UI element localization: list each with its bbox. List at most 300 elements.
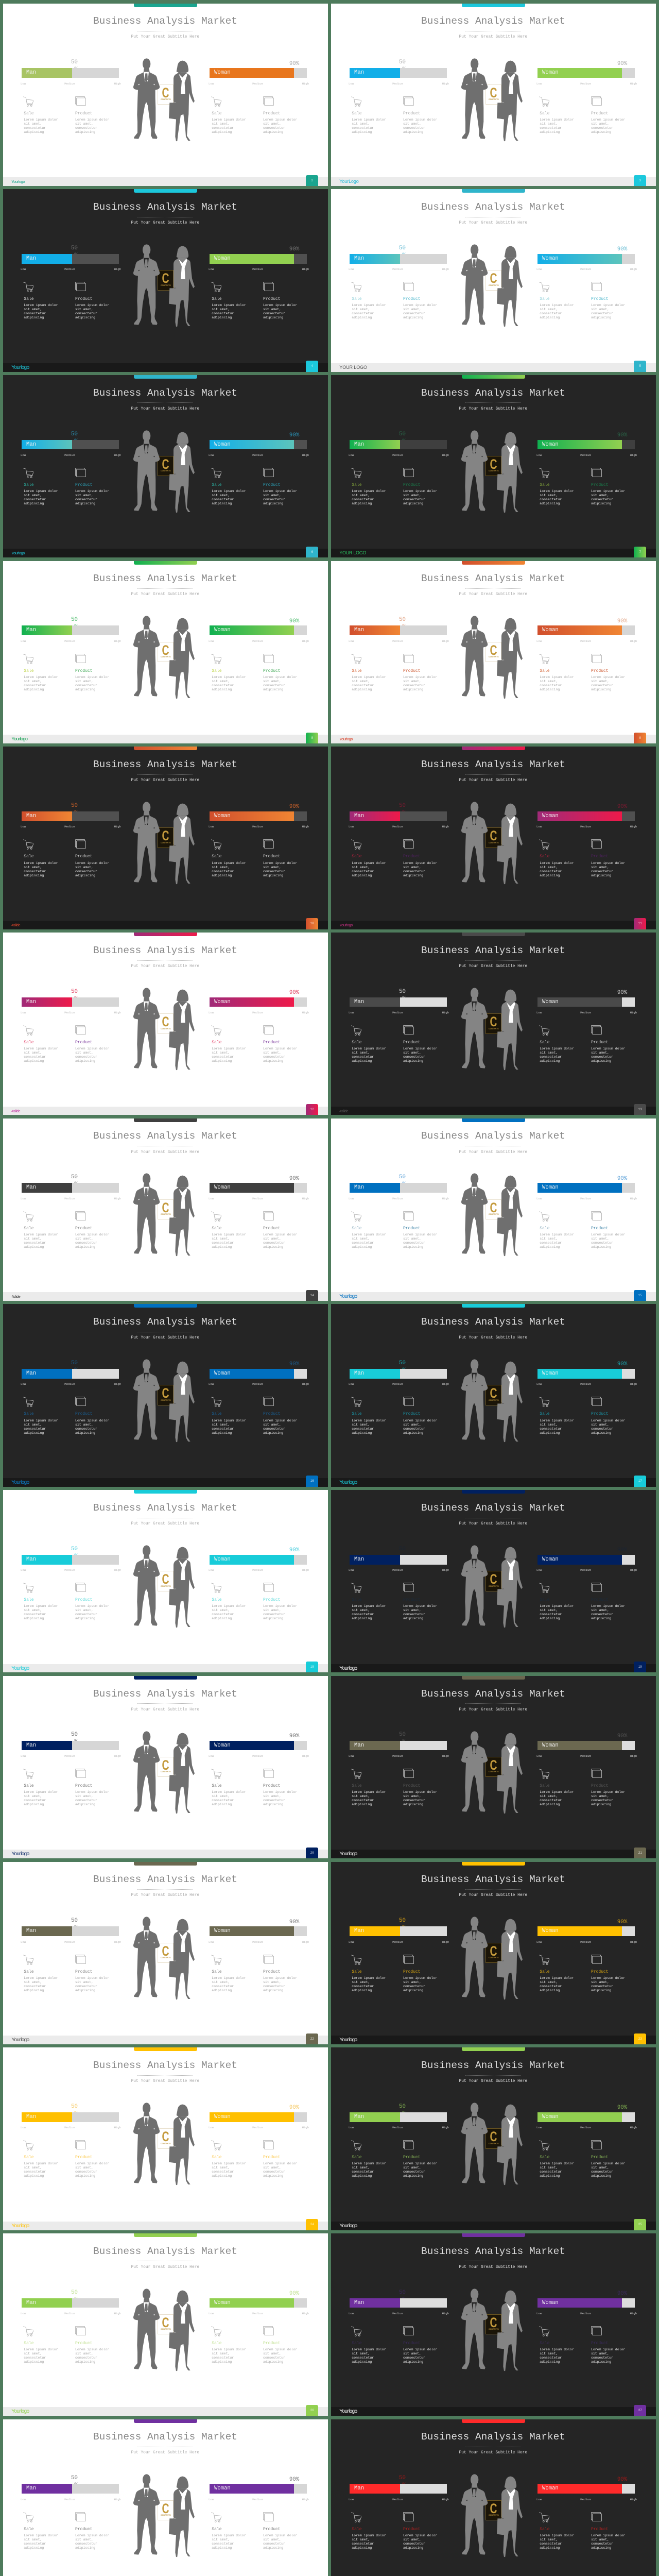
scale: High [442,639,449,643]
bar [210,1369,307,1379]
logo badge: CONTENTS [161,284,171,286]
scale: Medium [64,2312,75,2315]
page number: 5 [639,364,641,368]
bar: Woman [542,2300,559,2306]
sale: Sale [212,1784,221,1788]
value: 50 % [71,989,78,1002]
bar: Man [354,256,364,262]
scale [206,1197,312,1200]
product: Lorem ipsum dolor sit amet, consectetur adipiscing [591,2534,625,2550]
page number: 26 [310,2409,314,2412]
product: Lorem ipsum dolor sit amet, consectetur adipiscing [403,1419,437,1435]
product: Lorem ipsum dolor sit amet, consectetur adipiscing [75,675,109,691]
value: 90% [617,618,627,624]
product: Lorem ipsum dolor sit amet, consectetur adipiscing [591,1604,625,1620]
figure: woman [496,803,523,885]
value: 50 % [399,1732,406,1745]
bar: Woman [214,2485,231,2492]
sale [352,839,391,877]
bar [210,68,307,78]
bar [350,254,447,264]
product: Product [263,1226,281,1231]
scale: Low [349,825,354,828]
figure: man [133,988,161,1069]
product: Lorem ipsum dolor sit amet, consectetur adipiscing [263,303,297,319]
product: Product [263,2155,281,2160]
logo badge: C [490,84,497,100]
sale [352,2326,391,2364]
sale: Lorem ipsum dolor sit amet, consectetur adipiscing [24,303,58,319]
footer [3,2407,328,2416]
product: Product [263,483,281,487]
product [591,1211,630,1249]
sale: Sale [540,2155,550,2160]
scale: Medium [392,1197,403,1200]
sale: Sale [24,1040,34,1045]
scale: Medium [64,2126,75,2129]
product: Product [75,1226,93,1231]
value: 50 % [399,803,406,816]
sale: Sale [24,2341,34,2346]
bar: Woman [214,2114,231,2120]
scale: Low [536,1197,542,1200]
sale: Sale [212,297,221,301]
scale: Medium [580,1754,591,1758]
product: Product [591,669,609,673]
page number [306,1848,318,1858]
scale [346,1197,452,1200]
bar: Woman [542,70,559,76]
sale: Sale [540,1784,550,1788]
scale: High [630,2312,637,2315]
bar: Man [26,256,36,262]
logo: Yourlogo [339,2037,357,2043]
scale: Medium [392,1011,403,1014]
scale [534,1011,640,1014]
bar [210,2484,307,2494]
figure: woman [496,989,523,1071]
scale [534,1754,640,1758]
figure: woman [168,2104,195,2186]
subtitle: Put Your Great Subtitle Here [459,592,527,597]
value: 90% [289,2477,299,2483]
figure: man [133,1545,161,1626]
bar: Woman [214,813,231,819]
figure: woman [168,1361,195,1443]
sale: Lorem ipsum dolor sit amet, consectetur adipiscing [24,1047,58,1063]
scale [19,1197,124,1200]
scale: Low [209,2312,214,2315]
accent tab [134,2233,197,2237]
scale: Low [536,1382,542,1386]
subtitle: Put Your Great Subtitle Here [131,406,199,411]
slide: page 13 [331,933,656,1115]
bar: Woman [542,442,559,448]
scale: Low [209,825,214,828]
scale: Medium [252,825,263,828]
page number: 12 [310,1108,314,1111]
value: 90% [289,61,299,67]
product: Product [263,1784,281,1788]
page number [306,1662,318,1672]
scale: High [630,453,637,457]
accent tab [462,747,525,750]
scale: Medium [580,2126,591,2129]
scale [209,81,309,86]
bar [537,68,635,78]
sale: Sale [24,297,34,301]
title: Business Analysis Market [93,2246,237,2257]
logo badge: CONTENTS [489,1399,499,1401]
product [263,2326,302,2364]
scale: High [442,1940,449,1943]
subtitle: Put Your Great Subtitle Here [459,221,527,225]
accent tab [134,1490,197,1494]
bar [350,997,447,1007]
scale: Medium [392,2498,403,2501]
footer [3,363,328,372]
value: 90% [617,1361,627,1367]
figure: woman [496,1175,523,1257]
scale: Low [536,1011,542,1014]
product: Lorem ipsum dolor sit amet, consectetur adipiscing [75,2534,109,2550]
bar [350,1369,447,1379]
slide: page 5 [331,189,656,372]
figure: woman [496,2104,523,2186]
sale: Sale [352,111,361,115]
product: Lorem ipsum dolor sit amet, consectetur adipiscing [591,861,625,877]
logo badge: CONTENTS [489,1213,499,1215]
scale: High [630,1197,637,1200]
logo badge [485,84,501,105]
scale: High [442,1197,449,1200]
logo badge: CONTENTS [161,656,171,658]
logo badge [485,1385,501,1405]
sale: Lorem ipsum dolor sit amet, consectetur adipiscing [212,1419,246,1435]
product: Lorem ipsum dolor sit amet, consectetur adipiscing [591,1976,625,1992]
sale [24,1025,63,1063]
scale: Low [536,2498,542,2501]
bar: Man [26,1556,36,1563]
sale: Sale [352,2155,361,2160]
scale: High [630,1754,637,1758]
product: Product [591,1784,609,1788]
title: Business Analysis Market [421,573,565,584]
accent tab [134,747,197,750]
product [591,2326,630,2364]
footer [331,549,656,557]
product [403,2326,442,2364]
sale: Sale [540,669,550,673]
sale: Lorem ipsum dolor sit amet, consectetur adipiscing [24,2348,58,2364]
page number: 22 [310,2037,314,2040]
sale: Lorem ipsum dolor sit amet, consectetur adipiscing [352,1604,386,1620]
slide: page 29 [331,2419,656,2576]
figure: man [461,2103,489,2184]
subtitle: Put Your Great Subtitle Here [131,1150,199,1155]
sale: Sale [352,1226,361,1231]
scale [536,81,637,86]
value: 50 % [71,2475,78,2488]
logo badge [158,1013,174,1033]
scale: Low [209,1940,214,1943]
logo: Yourlogo [11,2037,29,2043]
sale [24,1397,63,1435]
logo badge: C [162,1385,169,1401]
scale: Low [209,1568,214,1572]
logo: 4slide [11,1109,20,1113]
scale [19,2312,124,2315]
scale [346,1011,452,1014]
footer [331,2036,656,2044]
page number [634,1104,646,1115]
value: 50 % [399,2104,406,2117]
bar [537,1926,635,1936]
logo: Yourlogo [11,365,29,370]
value: 90% [617,1733,627,1739]
slide: page 15 [331,1118,656,1301]
page number: 14 [310,1294,314,1297]
figure: woman [168,2476,195,2557]
title: Business Analysis Market [93,1688,237,1700]
page number: 4 [311,364,313,368]
page number [306,547,318,557]
bar [350,811,447,821]
logo badge: C [490,2129,497,2144]
accent tab [134,1118,197,1122]
bar: Man [26,1742,36,1749]
product: Product [591,297,609,301]
scale: Low [21,267,26,271]
panel: woman [534,429,643,509]
sale [352,2512,391,2550]
scale: Low [209,2126,214,2129]
logo: Yourlogo [11,736,27,741]
product [403,468,442,506]
panel: man [19,1730,127,1810]
sale [540,468,579,506]
figure: man [133,244,160,325]
sale: Lorem ipsum dolor sit amet, consectetur adipiscing [212,2348,246,2364]
scale: Medium [64,1754,75,1758]
product [591,2512,630,2550]
scale: Medium [252,1940,263,1943]
scale: High [630,1940,637,1943]
logo badge: CONTENTS [161,470,171,472]
logo badge: C [162,1200,169,1215]
page number: 9 [639,736,641,740]
panel: woman [534,1173,643,1252]
sale: Sale [212,1969,221,1974]
sale: Sale [24,2527,34,2532]
scale: Low [21,2498,26,2501]
product [263,282,297,319]
product: Product [403,111,421,115]
product [263,1955,302,1993]
bar: Man [26,1370,36,1377]
bar: Man [26,2114,36,2120]
panel: man [346,2473,455,2553]
product: Product [75,2155,93,2160]
value: 50 % [399,989,406,1002]
figure: man [461,1545,489,1626]
scale: High [302,1197,309,1200]
title: Business Analysis Market [421,945,565,956]
title: Business Analysis Market [93,2060,237,2071]
logo: Yourlogo [11,179,25,184]
sale: Lorem ipsum dolor sit amet, consectetur adipiscing [212,303,246,319]
bar [22,1555,119,1565]
scale: Medium [64,81,75,86]
slide: page 25 [331,2047,656,2230]
sale: Lorem ipsum dolor sit amet, consectetur adipiscing [352,303,386,319]
product: Product [403,1969,421,1974]
page number: 2 [311,178,313,182]
scale: High [114,639,121,643]
panel: woman [206,1544,315,1624]
figure: woman [168,2290,195,2371]
subtitle: Put Your Great Subtitle Here [131,221,199,225]
bar: Woman [542,1184,559,1191]
bar [22,1741,119,1750]
logo badge [158,2500,174,2520]
product: Lorem ipsum dolor sit amet, consectetur adipiscing [403,489,437,505]
product: Lorem ipsum dolor sit amet, consectetur adipiscing [263,2162,297,2178]
product: Product [403,297,421,301]
product: Product [75,1040,93,1045]
scale [346,2498,452,2501]
figure: man [461,2474,489,2556]
footer [331,1107,656,1115]
page number [306,918,318,929]
scale [534,1197,640,1200]
panel: man [346,1358,455,1438]
scale: Low [349,1940,354,1943]
accent tab [134,933,197,936]
value: 50 % [71,1174,78,1188]
scale: High [302,2498,309,2501]
bar [350,625,447,635]
accent tab [462,2233,525,2237]
sale [212,2140,251,2178]
logo badge: CONTENTS [161,1585,171,1587]
accent tab [462,933,525,936]
sale [352,1583,391,1621]
sale [352,1211,391,1249]
figure: woman [496,618,523,699]
bar: Man [354,1556,364,1563]
panel: woman [209,246,309,319]
sale [540,2512,579,2550]
panel: man [19,1173,127,1252]
sale: Lorem ipsum dolor sit amet, consectetur adipiscing [540,2348,574,2364]
title: Business Analysis Market [421,1688,565,1700]
logo badge: CONTENTS [489,2514,499,2516]
panel: woman [206,429,315,509]
product [75,2326,114,2364]
scale [206,1940,312,1943]
logo badge: C [162,1571,169,1587]
sale: Lorem ipsum dolor sit amet, consectetur adipiscing [352,1419,386,1435]
scale: High [114,2312,121,2315]
scale: High [442,1011,449,1014]
scale: Medium [252,1011,263,1014]
sale: Lorem ipsum dolor sit amet, consectetur adipiscing [212,1604,246,1620]
scale: Low [349,1011,354,1014]
subtitle: Put Your Great Subtitle Here [459,406,527,411]
sale: Sale [540,1598,550,1602]
product: Lorem ipsum dolor sit amet, consectetur adipiscing [263,2348,297,2364]
footer [3,549,328,557]
product: Lorem ipsum dolor sit amet, consectetur adipiscing [591,303,625,319]
sale [24,839,63,877]
product [263,1769,302,1807]
sale: Lorem ipsum dolor sit amet, consectetur adipiscing [24,1790,58,1806]
page number [306,733,318,743]
logo badge: CONTENTS [489,470,499,472]
bar: Man [26,442,36,448]
logo: Yourlogo [339,2409,357,2414]
logo badge [485,456,501,476]
subtitle: Put Your Great Subtitle Here [459,778,527,783]
page number: 15 [638,1294,642,1297]
subtitle: Put Your Great Subtitle Here [131,1335,199,1340]
product [75,1025,114,1063]
bar: Man [354,1742,364,1749]
logo badge [158,1199,174,1219]
value: 50 % [399,431,406,445]
product: Lorem ipsum dolor sit amet, consectetur adipiscing [75,1419,109,1435]
slide: page 8 [3,561,328,743]
sale [540,1397,579,1435]
sale [352,1769,391,1807]
sale [540,1211,579,1249]
product: Lorem ipsum dolor sit amet, consectetur adipiscing [403,1233,437,1249]
product: Lorem ipsum dolor sit amet, consectetur adipiscing [75,1604,109,1620]
product: Product [403,669,421,673]
panel: man [346,1916,455,1996]
scale: High [302,453,309,457]
product: Lorem ipsum dolor sit amet, consectetur adipiscing [263,118,297,134]
logo badge [158,270,174,291]
slide: page 7 [331,375,656,557]
sale: Lorem ipsum dolor sit amet, consectetur adipiscing [212,1790,246,1806]
accent tab [462,2047,525,2051]
logo badge [158,2314,174,2334]
logo: Yourlogo [11,2223,29,2229]
footer [331,2222,656,2230]
scale: Medium [580,453,591,457]
bar [210,440,307,449]
scale: High [302,1568,309,1572]
title: Business Analysis Market [93,201,237,213]
sale: Lorem ipsum dolor sit amet, consectetur adipiscing [352,1976,386,1992]
panel: man [19,1544,127,1624]
scale: Medium [64,2498,75,2501]
bar: Man [26,813,36,819]
panel: man [346,1173,455,1252]
sale [352,1955,391,1993]
bar [22,1926,119,1936]
product: Product [263,2527,281,2532]
scale: Medium [64,1011,75,1014]
sale [540,1025,579,1063]
sale: Sale [24,1226,34,1231]
sale: Sale [352,1040,361,1045]
subtitle: Put Your Great Subtitle Here [459,1893,527,1897]
scale [206,2126,312,2129]
accent tab [134,1676,197,1680]
